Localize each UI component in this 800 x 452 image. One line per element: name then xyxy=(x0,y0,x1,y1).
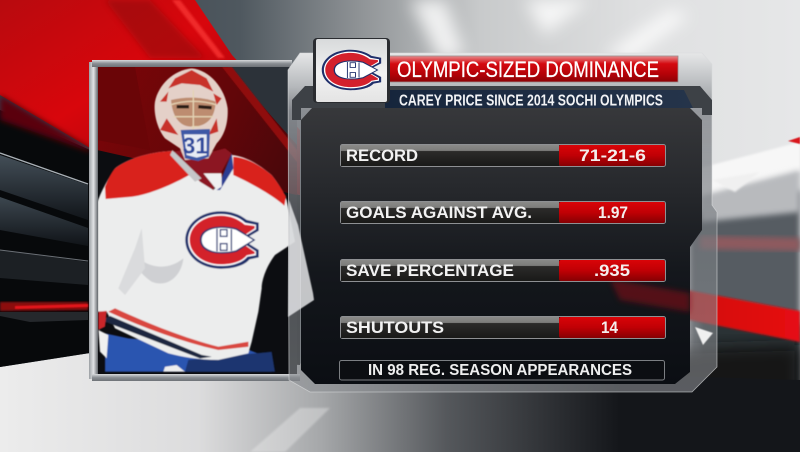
player: face xyxy=(171,98,216,127)
background: dark red streaks xyxy=(105,0,205,58)
row: shutouts: 14 xyxy=(601,319,618,337)
row: save percentage xyxy=(340,260,666,282)
panel frame xyxy=(288,53,717,392)
player: pants xyxy=(105,333,272,372)
row: save percentage: .935 xyxy=(594,262,630,280)
player: hem stripes xyxy=(108,308,248,350)
background: red highlight line xyxy=(172,0,225,58)
background: dark right section xyxy=(300,137,800,452)
logo box xyxy=(313,38,390,103)
stats panel xyxy=(288,38,717,392)
row: goals against avg: 1.97 xyxy=(598,204,628,222)
photo panel xyxy=(89,60,300,381)
player: throat guard xyxy=(181,129,210,161)
row: goals against avg: GOALS AGAINST AVG. xyxy=(346,204,532,222)
player: right shoulder red xyxy=(233,157,286,206)
row: shutouts: SHUTOUTS xyxy=(346,319,444,337)
row: shutouts xyxy=(340,316,666,338)
player: collar xyxy=(172,148,232,190)
panel: faint red stripe xyxy=(610,279,690,312)
footnote box: IN 98 REG. SEASON APPEARANCES xyxy=(368,362,632,379)
background: left black stripes xyxy=(0,110,300,367)
player: jersey xyxy=(98,151,295,360)
background: floor xyxy=(0,353,800,452)
background: light streaks xyxy=(410,0,690,60)
icon: small white arrow on frame xyxy=(695,327,713,345)
player: mask xyxy=(155,68,228,161)
player: left shoulder red xyxy=(105,151,189,199)
player: mask: 31 xyxy=(183,132,208,158)
row: save percentage: SAVE PERCENTAGE xyxy=(346,262,514,280)
photo frame xyxy=(89,60,300,381)
row: record: 71-21-6 xyxy=(579,147,646,165)
player: jersey logo xyxy=(185,211,259,269)
row: record xyxy=(340,144,666,166)
background: red stripe right xyxy=(590,272,800,342)
row: record: RECORD xyxy=(346,147,418,165)
background: floor streak xyxy=(250,408,330,452)
background: dark red edge xyxy=(0,95,90,152)
subtitle bar: CAREY PRICE SINCE 2014 SOCHI OLYMPICS xyxy=(399,92,663,110)
background: upper left red shape xyxy=(0,0,300,195)
player xyxy=(98,68,295,372)
player: jersey shading xyxy=(142,258,184,284)
player: arm overlapping the panel xyxy=(288,200,314,317)
logo xyxy=(322,50,381,90)
title bar: OLYMPIC-SIZED DOMINANCE xyxy=(397,57,659,82)
header dark rim xyxy=(292,86,712,120)
row: goals against avg xyxy=(340,202,666,224)
panel inner xyxy=(301,108,702,384)
photo background xyxy=(97,67,297,374)
